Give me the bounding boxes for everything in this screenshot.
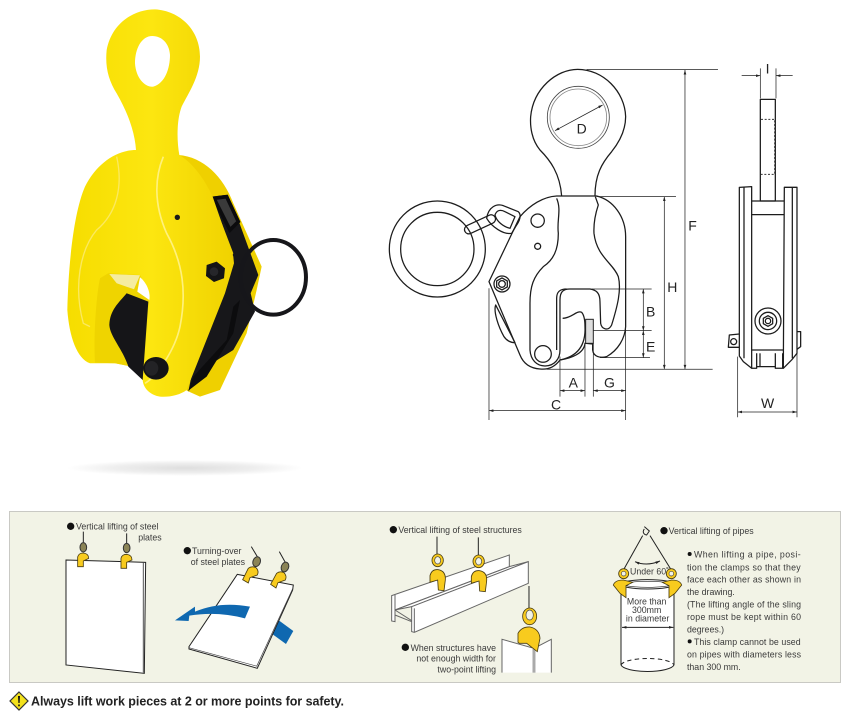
pull ring [241, 240, 306, 315]
dimension W [738, 350, 797, 417]
pipe labels: 300mm [632, 605, 661, 615]
technical drawing: side view [728, 60, 801, 417]
bullet heading: of steel plates [191, 557, 246, 567]
pin [143, 357, 169, 380]
chain link [214, 197, 238, 230]
bullet heading [67, 522, 162, 542]
single beam section [502, 639, 551, 673]
note text [402, 643, 496, 674]
pipe labels: Under 60˚ [630, 567, 669, 577]
pipe notes: than 300 mm. [687, 662, 741, 672]
black cam jaw [109, 293, 148, 380]
rear plate [178, 155, 262, 397]
pipe [621, 580, 674, 671]
warning icon [10, 692, 28, 710]
bullet heading: Vertical lifting of pipes [669, 526, 754, 536]
note text: not enough width for [416, 654, 496, 664]
bullet heading: Vertical lifting of steel structures [398, 525, 522, 535]
pipe notes: tion the clamps so that they [687, 562, 801, 572]
product photo: yellow vertical lifting clamp [67, 9, 306, 397]
label D: D [577, 120, 587, 136]
label W: W [761, 395, 775, 411]
pipe notes: the drawing. [687, 587, 735, 597]
pipe notes: (The lifting angle of the sling [687, 600, 801, 610]
pipe notes: face each other as shown in [687, 575, 801, 585]
diameter arrow [622, 626, 673, 629]
pipe notes: rope must be kept within 60 [687, 612, 801, 622]
clamps [243, 547, 290, 588]
pipe notes: degrees.) [687, 625, 724, 635]
usage panel background [10, 512, 840, 682]
dimension labels: A [569, 374, 579, 390]
hook and slings [624, 527, 671, 569]
two clamps [430, 537, 487, 592]
tilted plate [189, 574, 293, 668]
note text: two-point lifting [437, 664, 496, 674]
pipe notes: on pipes with diameters less [687, 650, 802, 660]
hex bolt [206, 262, 225, 282]
clamp body [489, 196, 626, 369]
blue arrow back [273, 620, 293, 644]
dimension labels [551, 218, 697, 412]
dimension lines [489, 69, 718, 420]
technical drawing: front view with dimensions [389, 69, 718, 420]
small hole [175, 215, 180, 220]
usage: vertical lifting of pipes [613, 526, 802, 672]
H beam [392, 555, 528, 632]
note text: When structures have [411, 643, 496, 653]
single clamp [518, 586, 540, 652]
pipe labels: More than [627, 596, 667, 606]
body highlights [145, 157, 183, 383]
blue arrow front [175, 605, 250, 621]
shank [760, 99, 775, 201]
bolt [755, 308, 781, 334]
chain link [463, 205, 520, 235]
label I: I [766, 60, 770, 76]
clamps [78, 532, 132, 568]
slot opening [137, 277, 150, 300]
front clamp body [67, 9, 234, 397]
pipe labels: in diameter [626, 614, 669, 624]
ring [389, 201, 485, 297]
bullet heading [184, 546, 246, 567]
product photo shadow [67, 460, 303, 476]
usage: vertical lifting of steel structures [390, 525, 551, 674]
pipe notes: This clamp cannot be used [694, 637, 801, 647]
dimension labels: F [688, 218, 697, 234]
eye [531, 69, 626, 196]
dimension labels: G [604, 374, 615, 390]
usage: vertical lifting of steel plates [66, 522, 162, 673]
pipe labels [626, 567, 669, 624]
dimension labels: C [551, 396, 561, 412]
usage: turning over of steel plates [175, 546, 293, 668]
black cam mechanism [188, 195, 258, 392]
side plates [728, 187, 801, 368]
bullet heading: Turning-over [192, 546, 242, 556]
bullet heading: Vertical lifting of steel [76, 522, 159, 532]
dimension labels: H [667, 279, 677, 295]
pipe notes [687, 550, 802, 672]
pipe notes: When lifting a pipe, posi- [694, 550, 801, 560]
clamps on pipe [613, 569, 682, 598]
dimension labels: B [646, 304, 655, 320]
safety note: Always lift work pieces at 2 or more points for safety. [31, 694, 344, 708]
rear plate in slot [95, 273, 149, 380]
plate [66, 560, 146, 673]
dimension I [742, 68, 793, 98]
dimension labels: E [646, 338, 655, 354]
bullet heading: plates [138, 532, 162, 542]
